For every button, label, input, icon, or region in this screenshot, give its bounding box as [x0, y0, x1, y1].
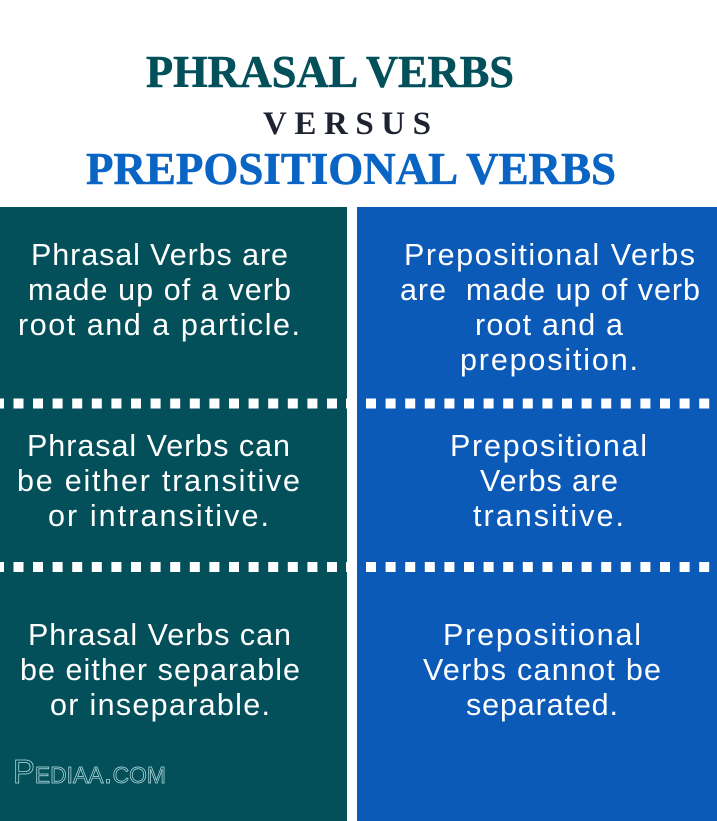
text: phrasal transitivity: Phrasal Verbs can: [27, 429, 290, 463]
text: prepositional transitivity: Prepositional: [450, 429, 647, 463]
logo: pediaa.com: Pediaa.com: [13, 753, 166, 790]
heading: prepositional verbs: PREPOSITIONAL VERBS: [86, 144, 616, 194]
text: prepositional transitivity: transitive.: [473, 499, 624, 533]
text: phrasal separability: be either separable: [20, 653, 300, 687]
panel: phrasal verbs column: [0, 207, 347, 821]
heading: phrasal verbs: PHRASAL VERBS: [146, 47, 514, 97]
divider: first row dotted line: [0, 398, 709, 408]
heading: versus: VERSUS: [263, 106, 431, 142]
text: prepositional composition: are made up of verb: [400, 273, 700, 307]
text: phrasal separability: [20, 618, 300, 722]
text: prepositional transitivity: Verbs are: [480, 464, 618, 498]
divider: second row dotted line: [0, 562, 709, 572]
panel: prepositional verbs column: [357, 207, 717, 821]
text: phrasal composition: made up of a verb: [28, 273, 291, 307]
text: phrasal transitivity: be either transitive: [17, 464, 300, 498]
text: prepositional composition: [400, 238, 700, 377]
text: phrasal transitivity: or intransitive.: [48, 499, 269, 533]
text: prepositional composition: root and a: [475, 308, 623, 342]
text: phrasal composition: [18, 238, 300, 342]
text: prepositional composition: Prepositional Verbs: [404, 238, 695, 272]
text: phrasal separability: or inseparable.: [50, 688, 270, 722]
text: phrasal composition: root and a particle.: [18, 308, 300, 342]
text: prepositional separability: Verbs cannot be: [423, 653, 661, 687]
title: [86, 47, 616, 194]
text: prepositional separability: Prepositional: [443, 618, 641, 652]
text: phrasal composition: Phrasal Verbs are: [31, 238, 288, 272]
text: phrasal transitivity: [17, 429, 300, 533]
text: prepositional transitivity: [450, 429, 647, 533]
text: prepositional separability: [423, 618, 661, 722]
text: prepositional separability: separated.: [466, 688, 618, 722]
text: phrasal separability: Phrasal Verbs can: [28, 618, 291, 652]
text: prepositional composition: preposition.: [460, 343, 638, 377]
